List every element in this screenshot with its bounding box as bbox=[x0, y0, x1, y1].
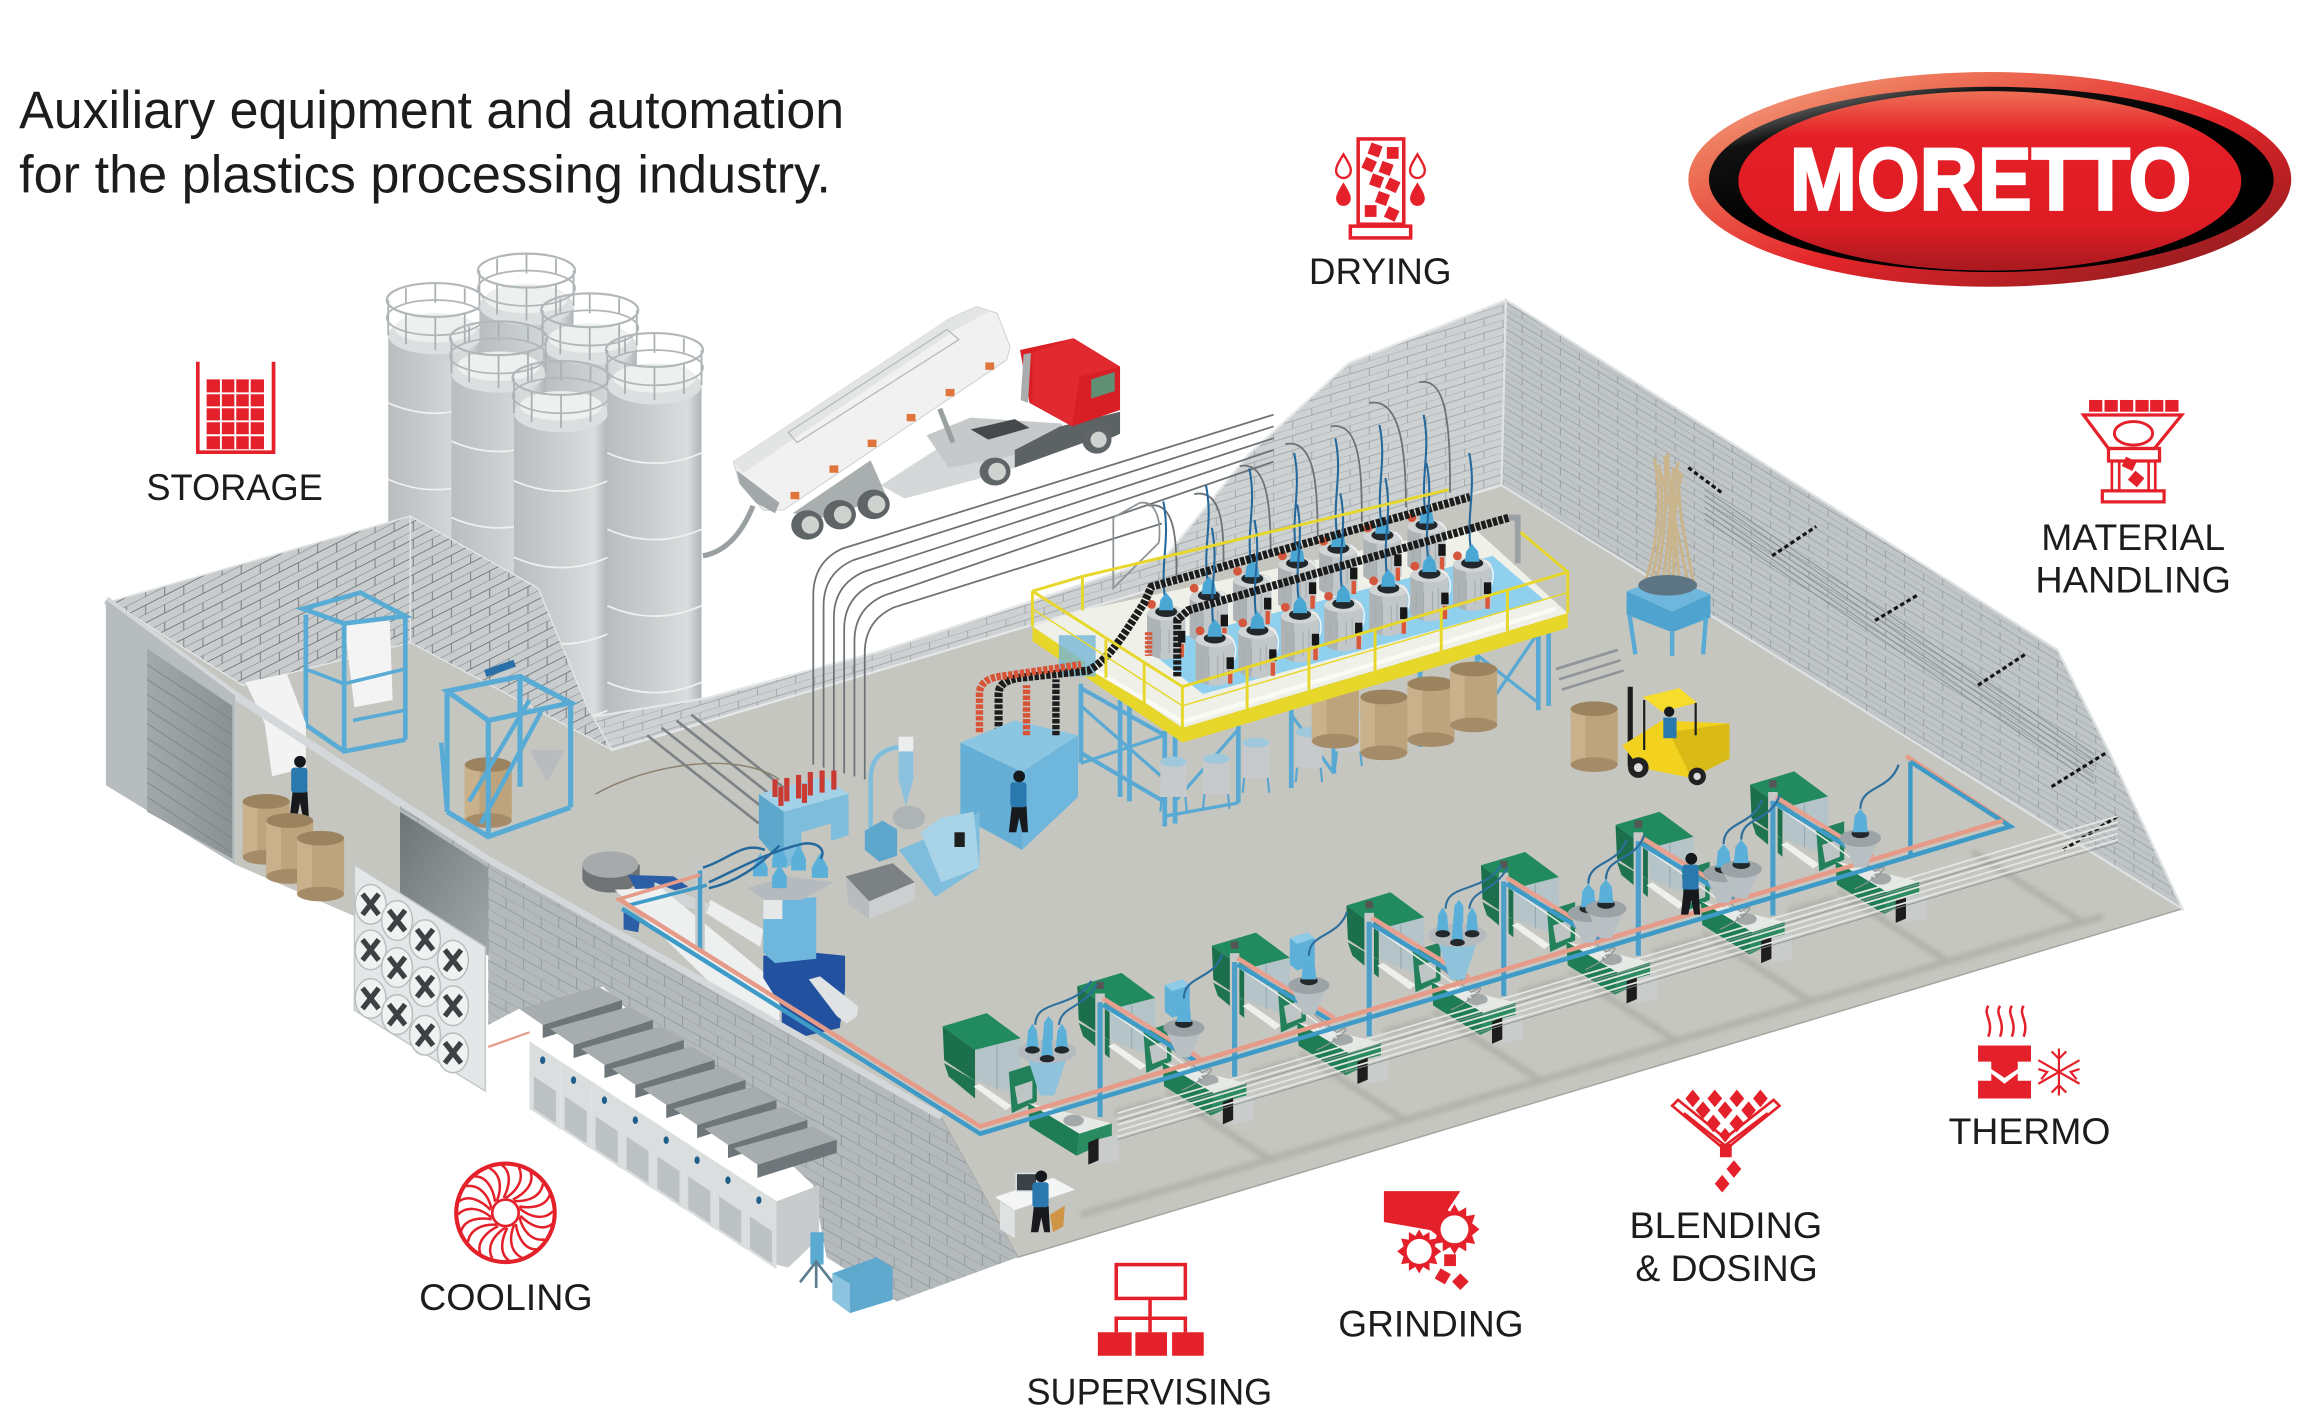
machine loaders bbox=[1018, 765, 1899, 1095]
grey scrap bin bbox=[846, 863, 915, 919]
forklift and drum bbox=[1571, 687, 1730, 785]
title: for the plastics processing industry. bbox=[19, 146, 831, 205]
front wall face bbox=[400, 806, 1018, 1301]
bulk bag station bbox=[303, 593, 405, 751]
floor shadow bands bbox=[1081, 851, 2103, 1215]
operator at dryer bbox=[1009, 771, 1028, 832]
front wall beam bbox=[106, 600, 941, 1118]
category: supervising bbox=[1027, 1265, 1272, 1412]
hoppers and drums under platform bbox=[1160, 662, 1497, 812]
white storage bag bbox=[246, 673, 306, 776]
category: storage: STORAGE bbox=[146, 467, 323, 508]
icon: storage racks bbox=[198, 362, 274, 452]
machine gantries and pipework bbox=[980, 762, 2010, 1134]
logo: Moretto bbox=[1688, 72, 2291, 287]
silo unloading station bbox=[441, 663, 571, 837]
category: material handling: HANDLING bbox=[2035, 560, 2231, 601]
category: blending and dosing: & DOSING bbox=[1635, 1248, 1818, 1289]
logo: Moretto: MORETTO bbox=[1790, 130, 2191, 229]
title: Auxiliary equipment and automation bbox=[19, 81, 844, 140]
injection moulding machines bbox=[943, 771, 1927, 1165]
category: material handling: MATERIAL bbox=[2041, 517, 2225, 558]
category: cooling bbox=[419, 1161, 593, 1318]
supervisor desk bbox=[995, 1170, 1075, 1238]
chiller units bbox=[529, 1041, 819, 1269]
service line bundle bbox=[1105, 801, 2118, 1140]
distribution manifold bbox=[596, 715, 849, 868]
left back wall bbox=[110, 516, 410, 685]
process cooling pipe run bbox=[488, 756, 2010, 1134]
tube manifold bbox=[1556, 453, 1710, 690]
icon: blending funnel bbox=[1672, 1090, 1780, 1193]
steel structure under platform bbox=[1081, 626, 1549, 826]
category: thermo: THERMO bbox=[1949, 1111, 2110, 1152]
central dehumidifier unit bbox=[960, 665, 1081, 850]
machine operator bbox=[1681, 853, 1700, 915]
back wall bbox=[588, 300, 1506, 750]
icon: mould with heat and snowflake bbox=[1978, 1006, 2080, 1098]
icon: dryer with drops bbox=[1336, 139, 1425, 238]
category: grinding bbox=[1338, 1191, 1524, 1345]
category: drying bbox=[1309, 139, 1452, 292]
extrusion material loaders bbox=[703, 843, 834, 900]
extrusion line bbox=[582, 851, 858, 1037]
icon: hopper loader bbox=[2083, 400, 2182, 502]
left room floor bbox=[235, 696, 400, 916]
title bbox=[19, 81, 844, 205]
right wall bbox=[1502, 300, 2182, 909]
tanker truck bbox=[703, 307, 1120, 556]
wall mounted pipe lines bbox=[1688, 468, 2118, 850]
silos bbox=[387, 254, 703, 840]
drying platform bbox=[999, 415, 1568, 744]
category: thermo bbox=[1949, 1006, 2110, 1152]
category: supervising: SUPERVISING bbox=[1027, 1371, 1272, 1412]
category: material handling bbox=[2035, 400, 2231, 601]
fan cooler bank bbox=[354, 865, 485, 1091]
grinder bbox=[899, 812, 979, 897]
conveying pipes to dryers bbox=[813, 382, 1450, 779]
icon: grinder gears bbox=[1384, 1191, 1479, 1290]
category: drying: DRYING bbox=[1309, 251, 1452, 292]
left side wall bbox=[410, 516, 612, 750]
category: cooling: COOLING bbox=[419, 1277, 593, 1318]
category: blending and dosing: BLENDING bbox=[1629, 1205, 1822, 1246]
category: blending and dosing bbox=[1629, 1090, 1822, 1289]
small loader beside wall bbox=[800, 1232, 832, 1288]
category: grinding: GRINDING bbox=[1338, 1304, 1524, 1345]
category: storage bbox=[146, 362, 323, 508]
icon: network hierarchy bbox=[1098, 1265, 1204, 1356]
paper drums and storage operator bbox=[243, 756, 344, 901]
left wall block bbox=[106, 600, 235, 865]
chiller roof steps bbox=[519, 987, 837, 1178]
icon: cooling fan bbox=[454, 1161, 557, 1265]
blue pump box bbox=[832, 1257, 893, 1313]
central feeder and filter bbox=[865, 737, 925, 862]
factory floor bbox=[110, 485, 2182, 1257]
